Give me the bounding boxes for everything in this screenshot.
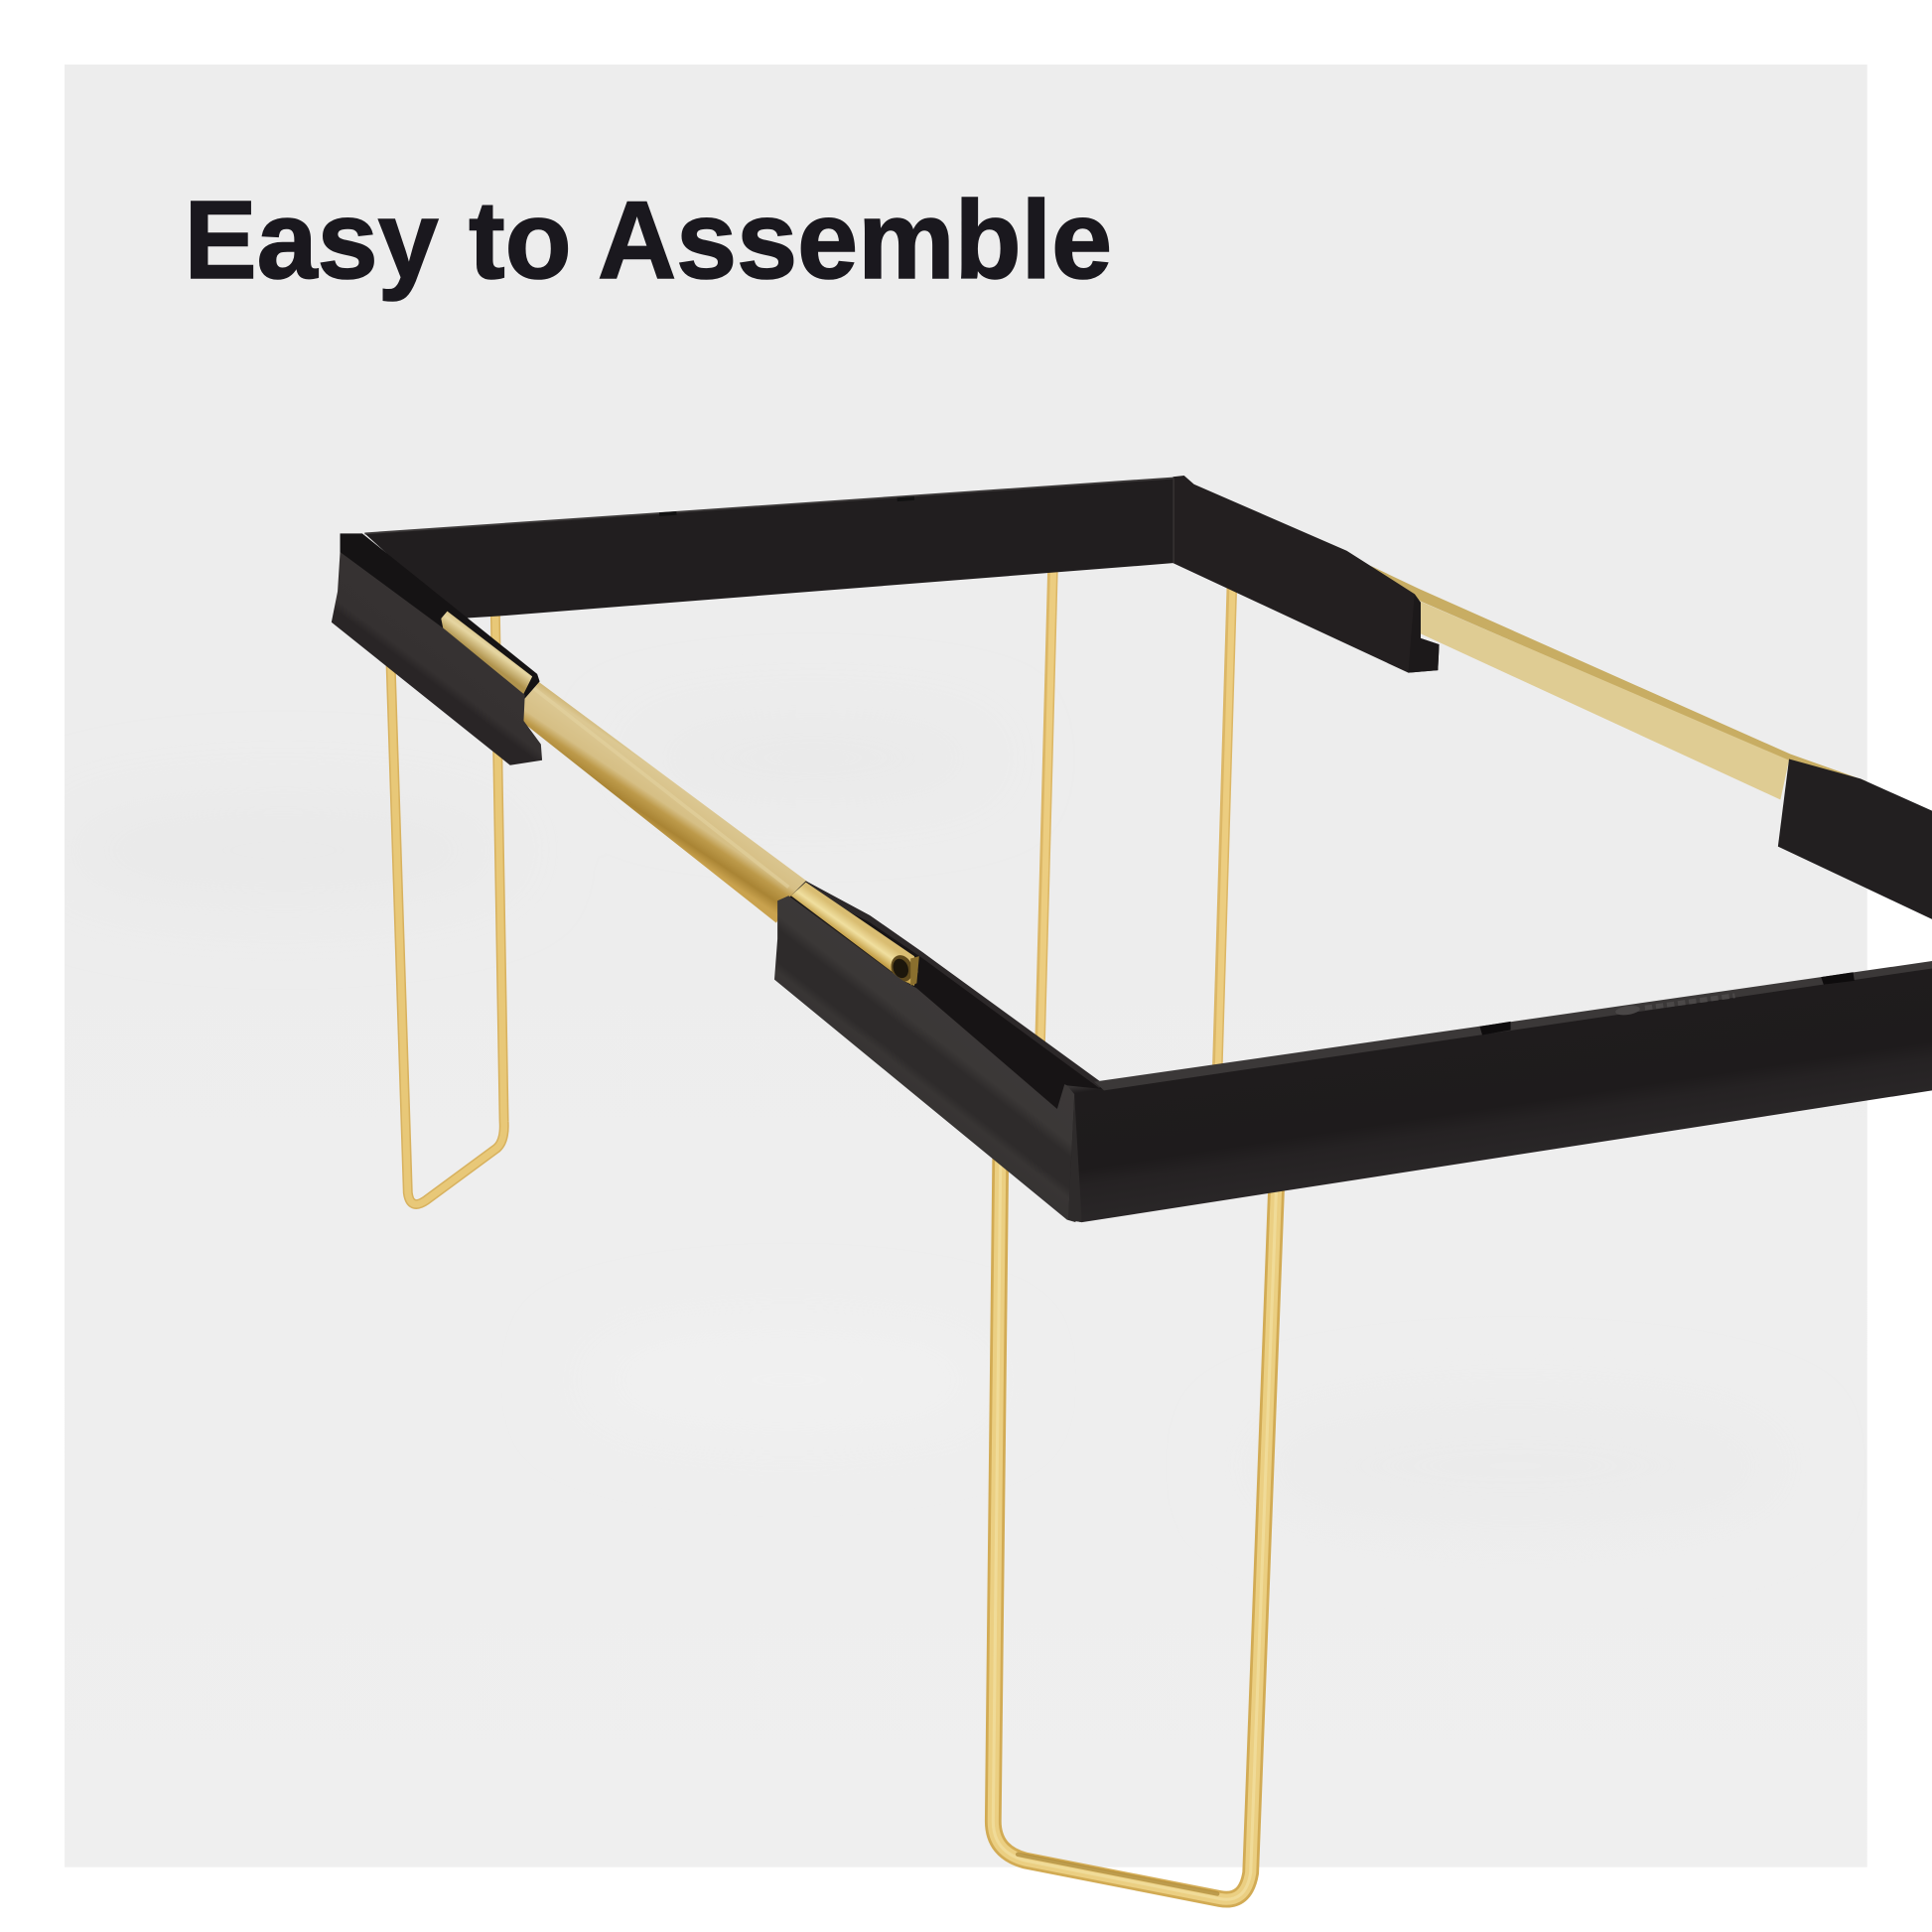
back rail: black [364, 479, 1173, 619]
far brass bar [1370, 566, 1866, 799]
near clip: black channel with inner wall [774, 881, 1104, 1222]
tube end [888, 952, 919, 986]
front rail: black [1067, 961, 1932, 1222]
leg: front wire loop [993, 1159, 1277, 1899]
slot marks [1480, 1022, 1511, 1035]
left clip: black channel [332, 533, 542, 765]
leg: rear right wire [1217, 579, 1233, 1072]
near brass bar [522, 675, 808, 923]
leg: rear centre wire [1039, 567, 1053, 1047]
brass tube in left clip [441, 612, 532, 696]
title: Easy to Assemble [185, 178, 1112, 302]
right rail: black, near end [1778, 759, 1932, 919]
embossed logo mark [1615, 1005, 1640, 1017]
brass tube in near clip [791, 883, 918, 986]
right rail: black, far end [1173, 476, 1440, 673]
leg: rear left wire [390, 617, 504, 1204]
